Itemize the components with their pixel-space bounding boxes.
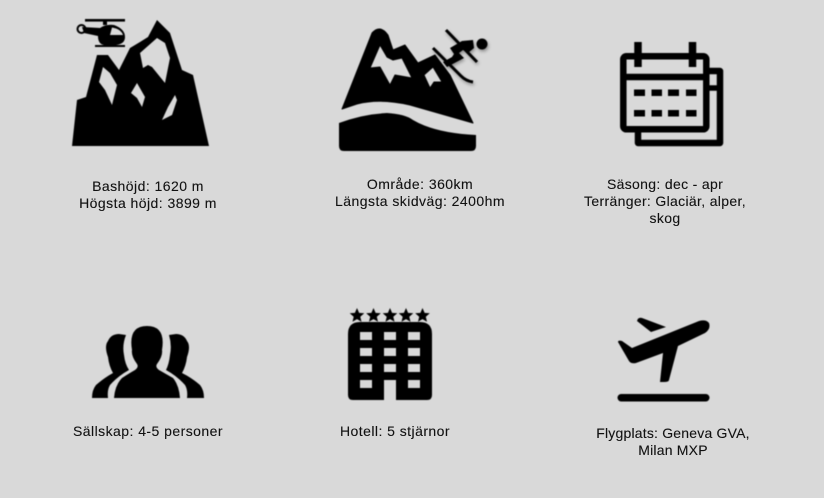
- text: airport: [596, 425, 750, 458]
- icon: group of people: [92, 326, 204, 398]
- icon: calendar: [623, 42, 720, 143]
- icon: ski mountain with skier: [339, 29, 488, 151]
- icon: right person: [166, 334, 204, 398]
- icon: center person: [114, 326, 180, 398]
- icon: runway: [618, 394, 710, 402]
- text: airport: Milan MXP: [638, 442, 708, 458]
- text: season: Terränger: Glaciär, alper,: [584, 193, 746, 209]
- icon: airplane: [637, 318, 666, 332]
- icon: mountain peaks: [342, 29, 473, 123]
- icon: helicopter: [78, 19, 125, 46]
- icon: mountain with helicopter: [72, 19, 209, 146]
- icon: airplane taking off: [618, 318, 710, 402]
- text: area: Område: 360km: [367, 176, 473, 192]
- icon: hotel building: [348, 322, 432, 400]
- text: area: Längsta skidväg: 2400hm: [335, 193, 505, 209]
- icon: skier: [433, 30, 488, 82]
- icon: jagged mountain: [72, 20, 209, 146]
- text: season: skog: [650, 210, 680, 226]
- text: area: [335, 176, 505, 209]
- icon: five star hotel: [348, 308, 432, 400]
- icon: ski slope: [339, 113, 476, 151]
- text: airport: Flygplats: Geneva GVA,: [596, 425, 750, 441]
- text: group size: Sällskap: 4-5 personer: [73, 423, 223, 439]
- text: season: Säsong: dec - apr: [607, 176, 723, 192]
- text: hotel: Hotell: 5 stjärnor: [340, 423, 450, 439]
- text: altitude: Högsta höjd: 3899 m: [79, 195, 217, 211]
- text: altitude: [79, 178, 217, 211]
- icon: left person: [92, 334, 129, 398]
- text: altitude: Bashöjd: 1620 m: [92, 178, 204, 194]
- text: season: [584, 176, 746, 226]
- icon: five stars: [350, 308, 430, 322]
